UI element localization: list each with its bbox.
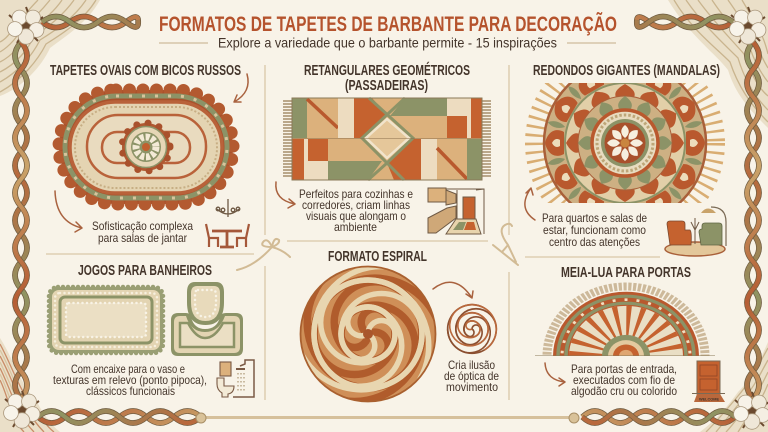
text: clássicos funcionais — [86, 384, 175, 398]
text: Com encaixe para o vaso e — [71, 362, 185, 376]
icon: small spiral — [439, 296, 505, 360]
rope border: top left — [42, 16, 138, 28]
text: movimento — [446, 380, 498, 394]
heading: FORMATO ESPIRAL — [328, 249, 427, 265]
subtitle: Explore a variedade que o barbante permite - 15 inspirações — [218, 34, 557, 50]
panel: redondos gigantes — [525, 53, 726, 256]
corner fibers top left — [0, 0, 100, 96]
heading: TAPETES OVAIS COM BICOS RUSSOS — [50, 63, 241, 79]
rectangular rug — [283, 98, 491, 180]
panel: jogos para banheiros — [49, 263, 254, 398]
text — [444, 358, 499, 394]
text — [92, 219, 193, 245]
icon: kitchen corridor — [428, 188, 484, 234]
text: visuais que alongam o — [306, 209, 406, 223]
text: centro das atenções — [549, 235, 640, 249]
bottom cord — [196, 413, 579, 423]
text: texturas em relevo (ponto pipoca), — [53, 373, 207, 387]
half moon rug — [535, 282, 715, 356]
text: Cria ilusão — [448, 358, 495, 372]
heading: JOGOS PARA BANHEIROS — [78, 263, 212, 279]
knot right — [493, 224, 518, 265]
text: Para quartos e salas de — [542, 211, 647, 225]
icon: cotton bottom right — [734, 392, 768, 429]
dividers — [46, 65, 660, 400]
text: ambiente — [334, 220, 377, 234]
heading — [304, 62, 470, 94]
text — [542, 211, 647, 249]
arrow — [276, 182, 295, 208]
rope border: bottom left — [38, 411, 201, 423]
panel: formato espiral — [300, 251, 499, 402]
spiral rug — [300, 266, 436, 402]
icon: cotton top right — [730, 7, 766, 44]
rope border: bottom right — [582, 411, 735, 423]
arrow — [525, 188, 535, 220]
text: Sofisticação complexa — [92, 219, 193, 233]
oval rug — [59, 90, 233, 204]
text: algodão cru ou colorido — [571, 384, 677, 398]
toilet lid cover — [187, 282, 224, 325]
text: Para portas de entrada, — [571, 362, 677, 376]
text: para salas de jantar — [98, 231, 187, 245]
arrow — [545, 363, 565, 386]
corner fibers bottom left — [0, 338, 60, 432]
panel: meia-lua — [535, 267, 725, 402]
title: FORMATOS DE TAPETES DE BARBANTE PARA DECORAÇÃO — [159, 13, 617, 36]
mandala rug — [525, 83, 725, 203]
text — [571, 362, 677, 398]
panel: retangulares — [276, 62, 491, 234]
icon: dining table with chandelier — [206, 199, 249, 247]
icon: cotton top left — [8, 7, 44, 44]
arrow — [55, 191, 82, 232]
icon: living room — [665, 207, 726, 256]
text: executados com fio de — [573, 373, 675, 387]
icon: door with welcome mat — [692, 361, 725, 402]
contour mat — [171, 313, 243, 356]
panel: tapetes ovais — [50, 63, 249, 247]
knot left — [237, 239, 290, 270]
icon: bathroom — [217, 360, 254, 397]
bath mat large — [49, 287, 163, 353]
rope border: left — [15, 42, 27, 399]
corner fibers bottom right — [700, 342, 768, 432]
arrow — [234, 74, 248, 102]
icon: door with welcome mat: WELCOME — [699, 396, 719, 402]
heading: (PASSADEIRAS) — [345, 78, 428, 94]
text: Perfeitos para cozinhas e — [299, 187, 413, 201]
rope border: right — [747, 42, 759, 399]
text — [53, 362, 207, 398]
text: estar, funcionam como — [543, 223, 646, 237]
heading: MEIA-LUA PARA PORTAS — [561, 265, 691, 281]
text: de óptica de — [444, 369, 499, 383]
heading: RETANGULARES GEOMÉTRICOS — [304, 62, 470, 79]
icon: cotton bottom left — [4, 391, 40, 428]
arrow — [433, 282, 473, 298]
corner fibers top right — [668, 0, 768, 128]
text — [299, 187, 413, 234]
text: corredores, criam linhas — [302, 198, 410, 212]
rope border: top right — [637, 16, 733, 28]
